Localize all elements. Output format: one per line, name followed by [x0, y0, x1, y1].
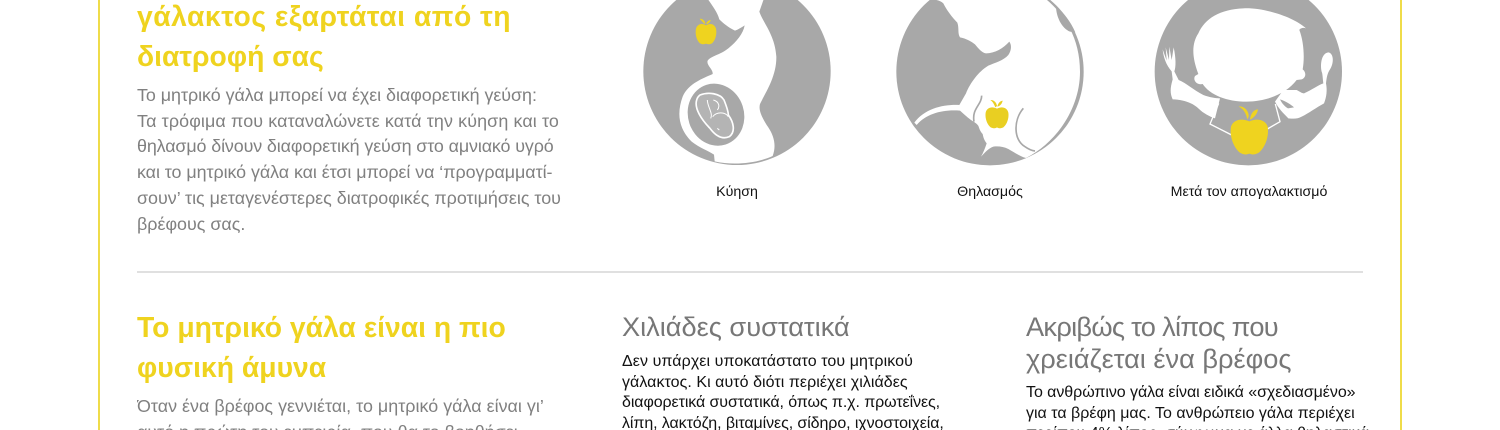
yellow frame left edge — [98, 0, 100, 430]
icon: breastfeeding circle — [896, 0, 1084, 166]
panel: natural defence — [137, 311, 544, 430]
label: after weaning: Μετά τον απογαλακτισμό — [1171, 184, 1327, 200]
panel: exactly the fat a baby needs — [1026, 311, 1369, 430]
heading: natural defence: Το μητρικό γάλα είναι η πιο — [137, 311, 506, 343]
heading: milk depends on diet — [137, 0, 511, 72]
text block: natural defence — [137, 396, 544, 430]
icon: after weaning circle — [1154, 0, 1342, 166]
label: pregnancy: Κύηση — [716, 184, 758, 200]
text block: taste of milk — [137, 85, 561, 234]
panel: thousands of ingredients — [622, 311, 944, 430]
heading: natural defence — [137, 311, 506, 383]
text block: ingredients: διαφορετικά συστατικά, όπως π.χ. πρωτεΐνες, — [622, 394, 940, 411]
heading: the fat a baby needs: χρειάζεται ένα βρέφος — [1026, 343, 1291, 374]
fetus — [696, 93, 733, 138]
text block: taste of milk: Τα τρόφιμα που καταναλώνετε κατά την κύηση και το — [137, 111, 559, 131]
apple — [985, 100, 1009, 128]
text block: taste of milk: σουν’ τις μεταγενέστερες διατροφικές προτιμήσεις του — [137, 188, 561, 208]
child silhouette — [1163, 8, 1333, 119]
yellow frame right edge — [1400, 0, 1402, 430]
text block: ingredients: Δεν υπάρχει υποκατάστατο του μητρικού — [622, 353, 913, 370]
text block: taste of milk: βρέφους σας. — [137, 214, 245, 234]
label: breastfeeding: Θηλασμός — [957, 184, 1023, 200]
text block: taste of milk: θηλασμό δίνουν διαφορετική γεύση στο αμνιακό υγρό — [137, 136, 554, 156]
text block: ingredients — [622, 353, 944, 430]
text block: taste of milk: και το μητρικό γάλα και έτσι μπορεί να ‘προγραμματί- — [137, 162, 552, 182]
text block: ingredients: γάλακτος. Κι αυτό διότι περιέχει χιλιάδες — [622, 374, 908, 391]
text block: natural defence: Όταν ένα βρέφος γεννιέται, το μητρικό γάλα είναι γι’ — [137, 396, 544, 416]
apple — [696, 19, 716, 44]
heading: natural defence: φυσική άμυνα — [137, 351, 326, 383]
heading: thousands of ingredients: Χιλιάδες συστατικά — [622, 311, 850, 342]
divider — [137, 271, 1363, 273]
text block: fat: για τα βρέφη μας. Το ανθρώπειο γάλα περιέχει — [1026, 405, 1355, 422]
heading: milk depends on diet: γάλακτος εξαρτάται από τη — [137, 0, 511, 32]
icon: pregnancy circle — [643, 0, 831, 165]
text block: taste of milk: Το μητρικό γάλα μπορεί να έχει διαφορετική γεύση: — [137, 85, 537, 105]
text block: fat — [1026, 384, 1369, 430]
heading: the fat a baby needs: Ακριβώς το λίπος που — [1026, 311, 1278, 342]
text block: fat: Το ανθρώπινο γάλα είναι ειδικά «σχεδιασμένο» — [1026, 384, 1356, 401]
panel: diet heading and text — [137, 0, 561, 234]
heading: the fat a baby needs — [1026, 311, 1291, 374]
heading: milk depends on diet: διατροφή σας — [137, 40, 324, 72]
apple — [1231, 106, 1268, 154]
